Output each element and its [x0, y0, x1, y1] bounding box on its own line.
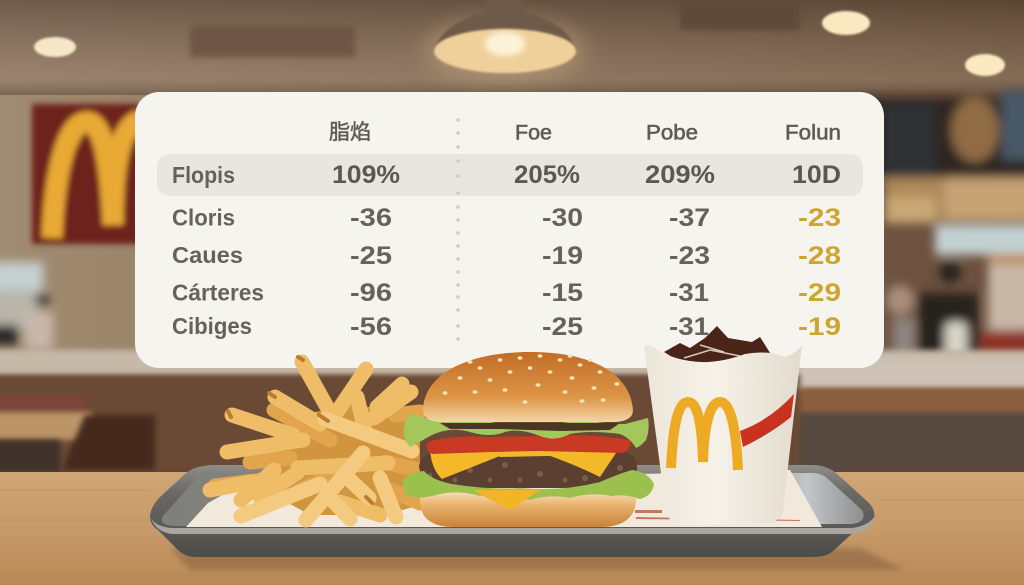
burger — [403, 352, 654, 527]
fries shadow mass — [265, 405, 420, 515]
tray paper liner — [186, 470, 822, 527]
tomato — [427, 435, 630, 454]
column 4 values in gold: -19 — [798, 313, 841, 341]
lower cheese — [473, 490, 540, 510]
column 1 values: -25 — [350, 242, 392, 270]
row labels: Flopis — [172, 162, 235, 188]
column 1 values: -96 — [350, 279, 392, 307]
column 3 values: -31 — [669, 313, 709, 341]
sesame seeds — [442, 354, 620, 404]
column 3 values: -31 — [669, 279, 709, 307]
column 2 values — [542, 204, 583, 341]
row labels — [172, 162, 264, 339]
column headers: Foe — [515, 122, 552, 144]
column 4 values in gold: -23 — [798, 204, 841, 232]
row labels: Caues — [172, 242, 243, 268]
top lettuce — [404, 414, 649, 448]
highlighted row values — [332, 161, 841, 189]
patty — [419, 451, 637, 488]
column headers: Pobe — [646, 122, 698, 144]
chocolate topping — [664, 326, 772, 366]
cup body — [644, 345, 802, 525]
fries back layer — [215, 410, 420, 503]
panel: nutrition table — [135, 92, 884, 368]
column 3 values: -23 — [669, 242, 710, 270]
column headers: 脂焰 — [329, 121, 371, 144]
column 2 values: -15 — [542, 279, 583, 307]
yellow arches logo — [671, 402, 738, 470]
column 2 values: -30 — [542, 204, 583, 232]
fries front layer — [241, 419, 412, 520]
french fries — [210, 357, 420, 520]
ceiling lights — [34, 0, 1005, 80]
highlighted row values: 109% — [332, 161, 400, 189]
column headers: Folun — [785, 122, 841, 144]
wooden table — [0, 472, 1024, 585]
column 1 values — [350, 204, 392, 341]
red wall sign with yellow arches — [32, 104, 140, 244]
tray — [150, 465, 905, 570]
row labels: Cárteres — [172, 280, 264, 306]
bottom lettuce — [403, 470, 654, 500]
column 3 values: -37 — [669, 204, 710, 232]
column headers — [329, 121, 841, 144]
column 1 values: -56 — [350, 313, 392, 341]
highlighted row band — [157, 154, 863, 196]
column 1 values: -36 — [350, 204, 392, 232]
highlighted row values: 209% — [645, 161, 715, 189]
column 4 values in gold — [798, 204, 841, 341]
row labels: Cloris — [172, 204, 235, 230]
upper cheese — [430, 449, 618, 479]
red stripe — [740, 394, 794, 447]
highlighted row values: 10D — [792, 161, 841, 189]
fries middle layer — [210, 362, 411, 515]
column 3 values — [669, 204, 710, 341]
highlighted row values: 205% — [514, 161, 580, 189]
top bun — [423, 352, 633, 422]
column 2 values: -19 — [542, 242, 583, 270]
cup of chocolate dessert — [644, 326, 802, 525]
row labels: Cibiges — [172, 313, 252, 339]
column 4 values in gold: -28 — [798, 242, 841, 270]
column 4 values in gold: -29 — [798, 279, 841, 307]
column 2 values: -25 — [542, 313, 583, 341]
bottom bun — [420, 491, 636, 527]
